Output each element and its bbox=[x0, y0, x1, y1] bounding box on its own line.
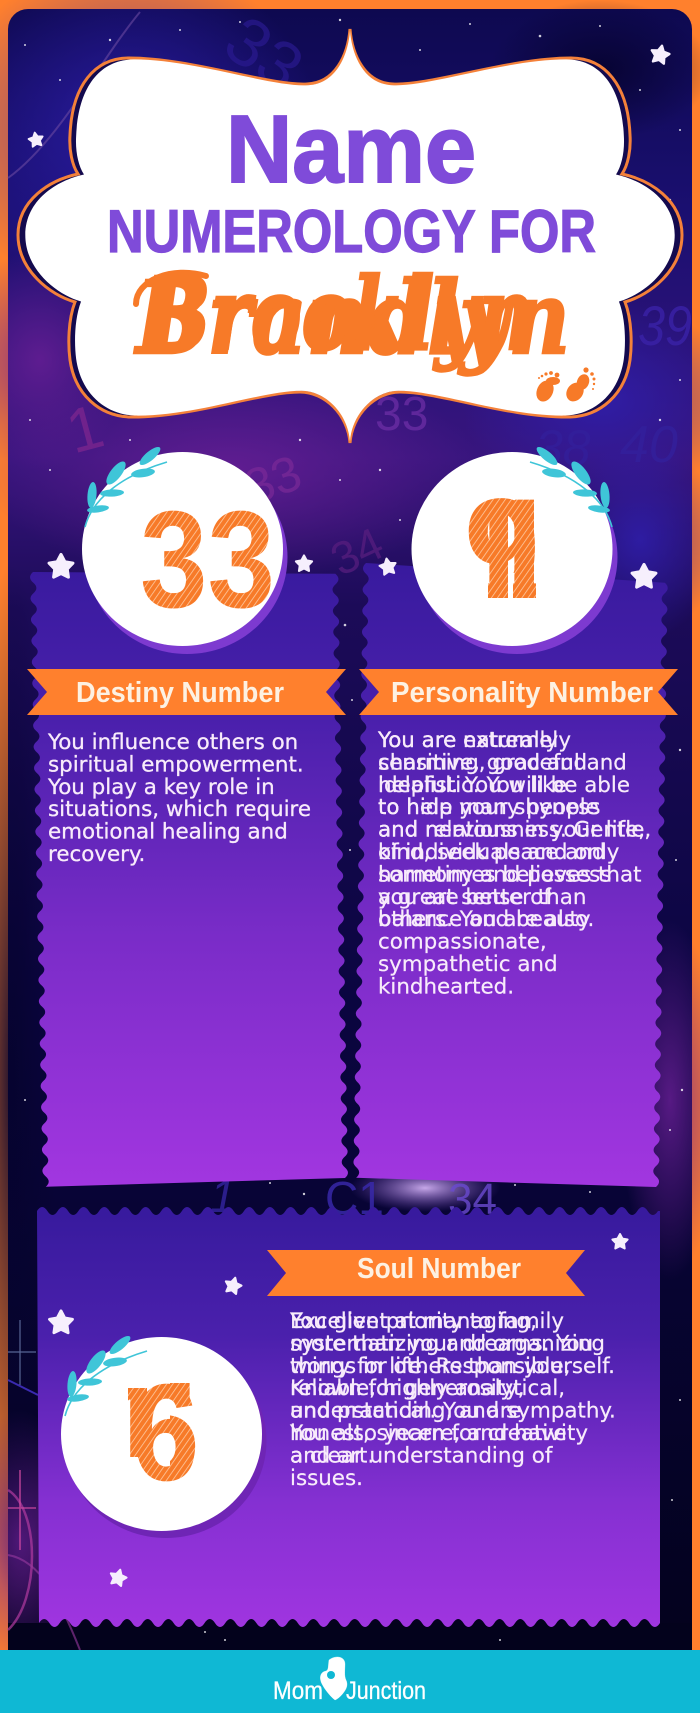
footer band bbox=[0, 1650, 700, 1713]
text: soul description, overlapping: understanding, and sympathy. bbox=[290, 1399, 616, 1424]
logo: MomJunction bbox=[273, 1657, 426, 1705]
text: personality description, overlapping bbox=[377, 728, 651, 999]
personality circle bbox=[416, 460, 618, 654]
text: soul description, overlapping: things in life. Responsible, bbox=[290, 1354, 570, 1379]
text: destiny description: situations, which require bbox=[48, 797, 311, 822]
text: destiny description bbox=[47, 730, 311, 867]
text: soul description, overlapping: You also yearn for creativity bbox=[289, 1421, 588, 1446]
text: personality description, overlapping: you are better than bbox=[378, 885, 586, 910]
soul value: 5 bbox=[122, 1354, 199, 1508]
text: personality description, overlapping: You are extremely bbox=[377, 728, 571, 753]
text: soul description, overlapping: Known for generosity, bbox=[290, 1376, 525, 1401]
soul value bbox=[128, 1383, 196, 1482]
panel: personality number bbox=[353, 444, 678, 1187]
text: personality description, overlapping: kindhearted. bbox=[378, 974, 514, 999]
icon: leaf sprig left bbox=[85, 444, 167, 527]
personality value: 11 bbox=[456, 470, 561, 629]
text: personality description, overlapping: sympathetic and bbox=[378, 952, 558, 977]
destiny value: 33 bbox=[140, 483, 275, 637]
text: soul description, overlapping: worry for others than yourself. bbox=[290, 1354, 615, 1379]
panel: soul number bbox=[37, 1207, 660, 1627]
text: soul description, overlapping: more than your dreams. You bbox=[290, 1331, 593, 1356]
text: soul description, overlapping: and art. bbox=[290, 1443, 374, 1468]
text: personality description, overlapping: helpful. You will be able bbox=[378, 773, 630, 798]
title: overlapping child names: Brandlyn bbox=[133, 259, 570, 377]
text: destiny description: You play a key role in bbox=[47, 775, 275, 800]
text: personality description, overlapping: charming, graceful and bbox=[378, 750, 627, 775]
soul value: 6 bbox=[131, 1356, 199, 1510]
soul value: 1 bbox=[98, 1354, 175, 1508]
destiny circle bbox=[86, 460, 288, 654]
logo: MomJunction: Mom bbox=[273, 1677, 323, 1705]
ribbon: personality number bbox=[359, 669, 678, 715]
personality value: 9 bbox=[464, 470, 540, 629]
faint background numerals: 39 bbox=[638, 294, 692, 357]
text: soul description, overlapping: and practical. You are bbox=[290, 1399, 521, 1424]
text: soul description, overlapping: Excellent at managing, bbox=[290, 1309, 537, 1334]
icon: leaf sprig soul bbox=[65, 1333, 147, 1416]
faint background numerals: 34 bbox=[323, 517, 391, 586]
text: personality description, overlapping: harmony and possess bbox=[378, 862, 611, 887]
icon: baby footprints bbox=[533, 367, 596, 405]
faint background numerals: 33 bbox=[211, 1, 317, 107]
text: personality description, overlapping: compassionate, bbox=[378, 930, 547, 955]
text: destiny description: recovery. bbox=[48, 842, 145, 867]
title plaque bbox=[18, 29, 682, 443]
text: personality description, overlapping: balance and beauty. bbox=[378, 907, 594, 932]
text: soul description, overlapping: issues. bbox=[290, 1466, 363, 1491]
heading: soul number: Soul Number bbox=[357, 1253, 521, 1285]
personality value bbox=[468, 498, 536, 598]
text: soul description, overlapping: honest, sincere, and have bbox=[290, 1421, 567, 1446]
title: overlapping child names: Brooklyn bbox=[144, 255, 534, 373]
text: personality description, overlapping: and nervousness. Gentle, bbox=[378, 818, 651, 843]
text: personality description, overlapping: others. You are also bbox=[378, 907, 588, 932]
ribbon: soul number bbox=[267, 1250, 585, 1296]
faint background numerals: 38 bbox=[535, 420, 591, 476]
text: soul description, overlapping: reliable, highly analytical, bbox=[290, 1376, 565, 1401]
soul circle bbox=[66, 1344, 266, 1538]
title: Name: Name bbox=[226, 96, 476, 203]
text: personality description, overlapping: of individuals and only bbox=[378, 840, 620, 865]
faint background numerals: 33 bbox=[375, 388, 428, 441]
text: personality description, overlapping: kind, seek peace and bbox=[378, 840, 606, 865]
text: soul description, overlapping: a clear understanding of bbox=[290, 1443, 553, 1468]
text: soul description, overlapping bbox=[289, 1309, 616, 1491]
ribbon: destiny number bbox=[27, 669, 346, 715]
text: personality description, overlapping: and relations in your life, bbox=[378, 818, 645, 843]
heading: destiny number: Destiny Number bbox=[76, 677, 284, 709]
icon: leaf sprig right bbox=[530, 444, 612, 527]
nebula rings bbox=[8, 12, 140, 1650]
text: personality description, overlapping: sensitive, good and bbox=[378, 750, 587, 775]
faint background numerals: 34 bbox=[448, 1175, 497, 1224]
panel: destiny number bbox=[27, 444, 348, 1187]
text: personality description, overlapping: to hide your shyness bbox=[378, 795, 601, 820]
text: personality description, overlapping: idealistic. You like bbox=[378, 773, 567, 798]
faint background numerals: 1 bbox=[60, 392, 111, 467]
text: personality description, overlapping: to help many people bbox=[378, 795, 599, 820]
text: destiny description: spiritual empowerment. bbox=[48, 752, 304, 777]
text: soul description, overlapping: systematizing and organizing bbox=[290, 1331, 605, 1356]
faint background numerals: C1 bbox=[325, 1172, 384, 1224]
text: personality description, overlapping: a great sense of bbox=[378, 885, 551, 910]
title: Numerology for: NUMEROLOGY FOR bbox=[107, 198, 596, 265]
text: destiny description: You influence others on bbox=[47, 730, 298, 755]
text: personality description, overlapping: You are naturally bbox=[377, 728, 558, 753]
faint background numerals: 40 bbox=[620, 416, 678, 474]
text: destiny description: emotional healing and bbox=[48, 820, 288, 845]
faint background numerals bbox=[60, 1, 692, 1224]
logo: MomJunction: Junction bbox=[346, 1677, 426, 1705]
text: soul description, overlapping: You give priority to family bbox=[289, 1309, 564, 1334]
faint background numerals: 1 bbox=[210, 1170, 236, 1222]
faint background numerals: 33 bbox=[237, 444, 309, 516]
text: personality description, overlapping: sometimes believes that bbox=[378, 862, 642, 887]
heading: personality number: Personality Number bbox=[391, 677, 653, 709]
